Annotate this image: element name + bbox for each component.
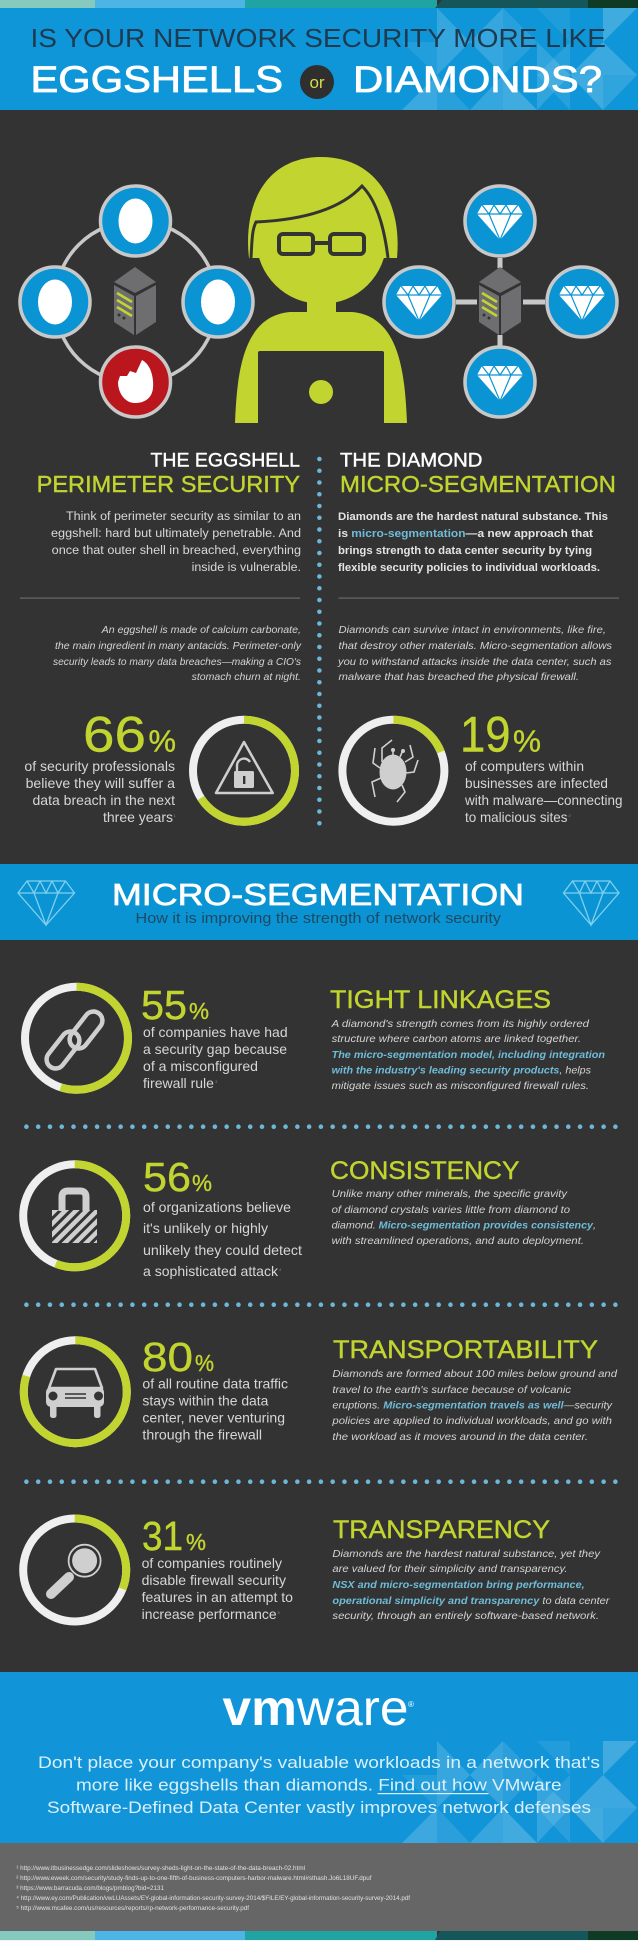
stat: 80%: center, never venturing	[142, 1410, 285, 1426]
stat: 66%: data breach in the next	[32, 792, 175, 808]
micro-segmentation banner	[0, 864, 638, 940]
consistency heading: CONSISTENCY	[330, 1157, 520, 1185]
title line 2: eggshells: EGGSHELLS	[30, 59, 283, 100]
icon: cracked egg	[100, 347, 170, 417]
tight linkages text: The micro-segmentation model, including integration	[332, 1050, 605, 1061]
stat: 66%: 1	[174, 813, 176, 818]
call to action text	[38, 1753, 600, 1817]
eggshell network diagram	[20, 186, 253, 417]
tight linkages text: A diamond's strength comes from its highly ordered	[331, 1019, 590, 1030]
call to action text: more like eggshells than diamonds. Find out how VMware	[76, 1776, 562, 1795]
eggshell description: inside is vulnerable.	[192, 562, 301, 574]
stat: 55%: firewall rule	[143, 1075, 214, 1091]
consistency text: diamond. Micro-segmentation provides consistency ,	[332, 1221, 596, 1232]
tight linkages text	[331, 1019, 605, 1092]
eggshell description: Think of perimeter security as similar to an	[66, 511, 301, 523]
stat: 56%	[143, 1154, 302, 1279]
stat: 55%: %	[189, 998, 209, 1024]
panel: the eggshell	[20, 450, 302, 825]
eggshell description: eggshell: hard but ultimately penetrable. And	[51, 528, 301, 540]
ring chart: 80% with car	[24, 1340, 127, 1443]
stat: 66%: 66	[83, 707, 146, 763]
stat: 55%: a security gap because	[143, 1041, 287, 1057]
vmware logo: vmware	[222, 1680, 408, 1736]
icon: diamond outline left	[18, 881, 74, 925]
eggshell heading: PERIMETER SECURITY	[37, 471, 300, 497]
icon: diamond left	[384, 267, 454, 337]
diamond italic note: that destroy other materials. Micro-segmentation allows	[338, 641, 612, 652]
eggshell italic note: stomach churn at night.	[192, 672, 301, 683]
icon: diamond top	[465, 186, 535, 256]
stat: 55%	[141, 982, 288, 1091]
stat: 66%: of security professionals	[24, 758, 175, 774]
stat: 80%: %	[195, 1350, 214, 1376]
stat: 31%: 5	[278, 1610, 280, 1615]
footnote 1: ¹ http://www.itbusinessedge.com/slideshows/survey-sheds-light-on-the-state-of-the-data-breach-02.html	[16, 1866, 305, 1872]
eggshell italic note: security leads to many data breaches—making a CIO's	[53, 657, 301, 668]
footnote 4: ⁴ http://www.ey.com/Publication/vwLUAssets/EY-global-information-security-survey-2014/$FILE/EY-global-information-security-survey-2014.pdf	[16, 1895, 410, 1902]
transparency text: operational simplicity and transparency to data center	[332, 1596, 610, 1607]
row: transparency	[23, 1513, 610, 1622]
stat: 19%: businesses are infected	[465, 775, 608, 791]
call to action panel	[0, 1672, 638, 1843]
or badge	[300, 65, 334, 99]
stat: 80%: 80	[142, 1334, 193, 1380]
diamond italic note: you to withstand attacks inside the data center, such as	[337, 657, 612, 668]
tight linkages heading: TIGHT LINKAGES	[330, 986, 551, 1014]
stat: 66%	[24, 707, 177, 825]
diamond heading	[340, 450, 616, 497]
stat: 56%: unlikely they could detect	[143, 1242, 302, 1258]
icon: egg top	[100, 186, 170, 256]
consistency text: of diamond crystals varies little from diamond to	[332, 1205, 570, 1216]
icon: diamond right	[547, 267, 617, 337]
stat: 31%: 31	[142, 1513, 183, 1559]
title line 2: diamonds: DIAMONDS?	[353, 59, 602, 100]
diamond network diagram	[384, 186, 617, 417]
transportability text: the workload as it moves around in the data center.	[332, 1432, 588, 1443]
stat: 19%: 19	[460, 707, 511, 763]
diamond italic note: malware that has breached the physical firewall.	[338, 672, 579, 683]
registered mark: ®	[408, 1700, 414, 1709]
panel: the diamond	[337, 450, 622, 825]
stat: 31%: of companies routinely	[142, 1555, 282, 1571]
stat: 31%: increase performance	[142, 1606, 277, 1622]
or badge: or	[309, 73, 325, 92]
eggshell heading	[37, 450, 300, 497]
diamond heading: THE DIAMOND	[340, 450, 482, 472]
row: consistency	[23, 1154, 596, 1279]
tight linkages text: mitigate issues such as misconfigured firewall rules.	[332, 1081, 589, 1092]
transparency heading: TRANSPARENCY	[333, 1516, 550, 1544]
diamond italic note	[337, 625, 612, 683]
stat: 56%: %	[192, 1170, 212, 1196]
bottom colour strip	[0, 1931, 638, 1941]
diamond description: Diamonds are the hardest natural substance. This	[338, 511, 608, 523]
transportability text: policies are applied to individual workloads, and go with	[331, 1416, 612, 1427]
eggshell italic note: the main ingredient in many antacids. Perimeter-only	[55, 641, 302, 652]
stat: 19%: with malware—connecting	[464, 792, 622, 808]
header banner	[0, 8, 638, 110]
diamond description: brings strength to data center security by tying	[338, 545, 592, 557]
icon: egg left	[20, 267, 90, 337]
stat: 19%: %	[513, 724, 541, 759]
stat: 19%	[460, 707, 622, 825]
stat: 56%: a sophisticated attack	[143, 1263, 279, 1279]
footnote 5: ⁵ http://www.mcafee.com/us/resources/reports/rp-network-performance-security.pdf	[16, 1905, 249, 1912]
diamond description: is micro-segmentation —a new approach that	[338, 528, 593, 540]
footnotes panel	[0, 1843, 638, 1931]
call to action text: Software-Defined Data Center vastly improves network defenses	[47, 1798, 591, 1817]
ring chart: 19% with bug	[342, 720, 444, 822]
tight linkages text: structure where carbon atoms are linked together.	[332, 1034, 581, 1045]
shoulders	[235, 295, 407, 423]
stat: 19%: 2	[568, 813, 572, 818]
transparency text: are valued for their simplicity and transparency.	[332, 1564, 568, 1575]
ring chart: 56% with padlock	[23, 1164, 126, 1267]
call to action text: Don't place your company's valuable workloads in a network that's	[38, 1753, 600, 1772]
stat: 56%: of organizations believe	[143, 1199, 291, 1215]
diamond heading: MICRO-SEGMENTATION	[340, 471, 616, 497]
title line 1: IS YOUR NETWORK SECURITY MORE LIKE	[30, 25, 606, 53]
transportability text	[331, 1369, 618, 1443]
icon: server left	[114, 267, 156, 335]
stat: 31%	[142, 1513, 293, 1622]
transparency text	[332, 1549, 610, 1622]
glasses	[279, 234, 364, 254]
stat: 56%: it's unlikely or highly	[143, 1220, 268, 1236]
icon: diamond bottom	[465, 347, 535, 417]
top colour strip	[0, 0, 638, 8]
laptop	[258, 351, 384, 424]
heading: MICRO-SEGMENTATION	[112, 877, 524, 912]
ring chart: 31% with magnifier	[23, 1518, 126, 1622]
transportability heading: TRANSPORTABILITY	[333, 1336, 598, 1364]
stat: 55%: of a misconfigured	[143, 1058, 258, 1074]
eggshell description: once that outer shell in breached, everything	[52, 545, 301, 557]
transparency text: Diamonds are the hardest natural substance, yet they	[332, 1549, 601, 1560]
stat: 56%: 4	[279, 1267, 282, 1272]
diamond description: flexible security policies to individual workloads.	[338, 562, 600, 574]
diamond description	[338, 511, 608, 574]
icon: server right	[479, 267, 521, 335]
consistency text: Unlike many other minerals, the specific gravity	[332, 1189, 568, 1200]
stat: 66%: believe they will suffer a	[26, 775, 175, 791]
icon: diamond outline right	[564, 881, 619, 925]
eggshell italic note: An eggshell is made of calcium carbonate,	[101, 625, 301, 636]
footnote 2: ² http://www.eweek.com/security/study-finds-up-to-one-fifth-of-business-computers-harbor-malware.html#sthash.Jo6L18UF.dpuf	[16, 1876, 372, 1882]
stat: 80%	[142, 1334, 288, 1443]
stat: 80%: through the firewall	[142, 1427, 262, 1443]
transportability text: Diamonds are formed about 100 miles below ground and	[332, 1369, 618, 1380]
sub-heading: How it is improving the strength of network security	[136, 911, 502, 927]
consistency text	[332, 1189, 596, 1247]
tight linkages text: with the industry's leading security products , helps	[332, 1066, 591, 1076]
transparency text: security, through an entirely software-based network.	[332, 1611, 599, 1622]
footnote 3: ³ https://www.barracuda.com/blogs/pmblog?bid=2131	[16, 1886, 165, 1892]
stat: 19%: to malicious sites	[465, 809, 568, 825]
eggshell italic note	[53, 625, 302, 683]
person with laptop	[235, 157, 407, 424]
stat: 56%: 56	[143, 1154, 191, 1200]
stat: 55%: 3	[215, 1079, 218, 1084]
stat: 55%: 55	[141, 982, 187, 1028]
stat: 19%: of computers within	[465, 758, 584, 774]
diamond italic note: Diamonds can survive intact in environments, like fire,	[338, 625, 606, 636]
stat: 80%: of all routine data traffic	[142, 1376, 288, 1392]
stat: 55%: of companies have had	[143, 1024, 288, 1040]
row: transportability	[24, 1334, 618, 1443]
stat: 31%: %	[186, 1529, 206, 1555]
transparency text: NSX and micro-segmentation bring performance,	[332, 1580, 585, 1591]
stat: 31%: features in an attempt to	[142, 1589, 293, 1605]
stat: 80%: stays within the data	[142, 1393, 269, 1409]
eggshell heading: THE EGGSHELL	[150, 450, 300, 472]
transportability text: eruptions. Micro-segmentation travels as well —security	[332, 1401, 613, 1412]
stat: 31%: disable firewall security	[142, 1572, 286, 1588]
ring chart: 66% with unlocked padlock warning	[193, 720, 295, 822]
head and hair	[248, 157, 398, 258]
ring chart: 55% with chain link	[25, 987, 128, 1090]
icon: egg right	[183, 267, 253, 337]
stat: 66%: %	[148, 724, 176, 759]
transportability text: travel to the earth's surface because of volcanic	[332, 1385, 572, 1396]
eggshell description	[51, 511, 301, 574]
stat: 66%: three years	[103, 809, 173, 825]
row: tight linkages	[25, 982, 605, 1092]
consistency text: with streamlined operations, and auto deployment.	[332, 1236, 584, 1247]
